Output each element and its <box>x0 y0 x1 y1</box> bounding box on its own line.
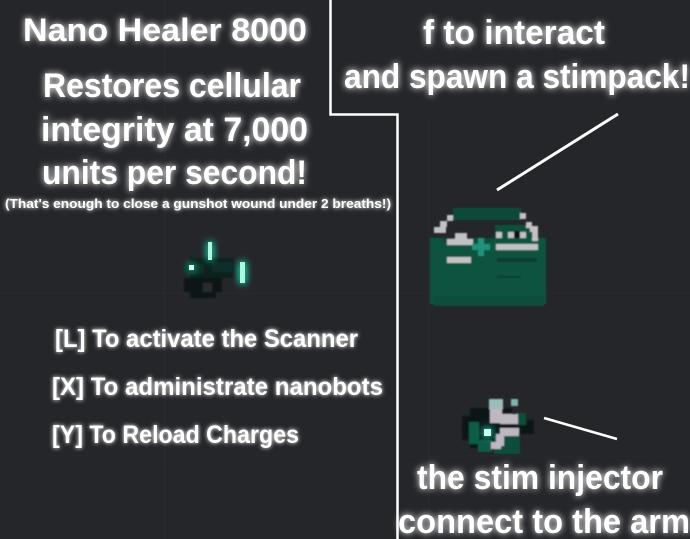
left title: Nano Healer 8000 <box>23 12 307 48</box>
injector light <box>484 429 491 436</box>
description text: units per second! <box>42 154 307 192</box>
icon: stim injector <box>462 399 534 454</box>
description text: integrity at 7,000 <box>41 111 308 149</box>
panel divider lines <box>330 0 398 539</box>
description text: Restores cellular <box>43 67 301 105</box>
right caption: the stim injector <box>417 459 663 497</box>
right heading: f to interact <box>423 14 605 52</box>
key bindings <box>52 325 383 449</box>
description text <box>41 67 308 192</box>
icon: green medkit <box>430 208 546 306</box>
arrow: to injector <box>544 418 617 439</box>
icon: nano healer device <box>184 242 245 298</box>
right heading <box>344 14 690 96</box>
key bindings: [X] To administrate nanobots <box>52 373 383 401</box>
right caption <box>398 459 690 539</box>
arrow: to medkit <box>497 114 618 190</box>
footnote: (That's enough to close a gunshot wound under 2 breaths!) <box>5 196 391 211</box>
key bindings: [L] To activate the Scanner <box>55 325 358 353</box>
key bindings: [Y] To Reload Charges <box>52 421 299 449</box>
